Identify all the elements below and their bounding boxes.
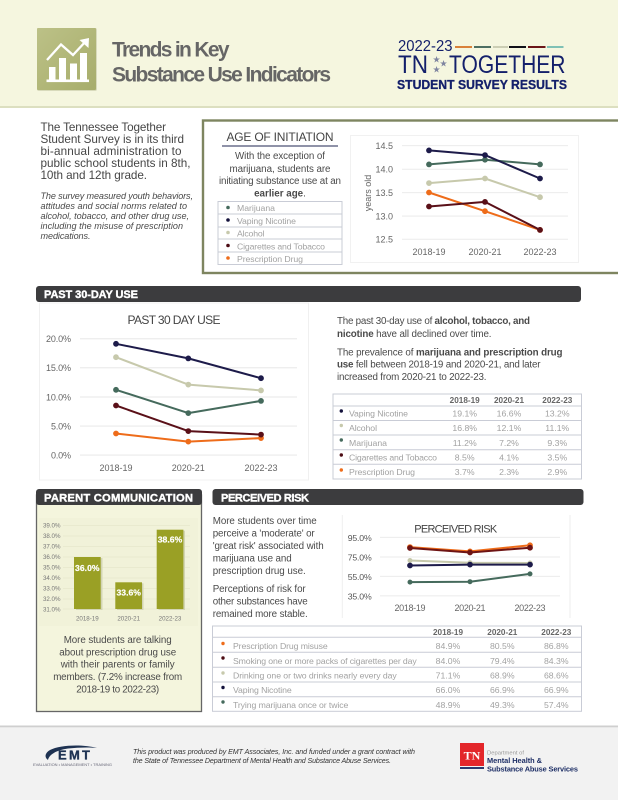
table: past 30-day use: Cigarettes and Tobacco [349,452,437,462]
bar chart: parent communication: 2022-23 [159,616,182,622]
line chart: perceived risk: PERCEIVED RISK [414,524,498,536]
table: perceived risk: 66.0% [436,685,461,695]
table: past 30-day use: 13.2% [545,408,570,418]
parent communication description [53,635,182,696]
logo: TN Department of Mental Health and Substance Abuse Services: Department of [487,750,524,756]
line chart: perceived risk: 95.0% [348,533,372,543]
intro text block: public school students in 8th, [40,157,190,170]
age of initiation legend: Marijuana [237,203,275,213]
age of initiation description: marijuana, students are [230,164,331,175]
intro text block: bi-annual administration to [40,145,182,158]
table: past 30-day use: 2020-21 [494,396,524,405]
intro text block: The survey measured youth behaviors, [40,191,193,201]
perceived risk description: perceive a 'moderate' or [213,529,315,540]
logo: TN Department of Mental Health and Substance Abuse Services [460,743,578,774]
line chart: perceived risk: 2020-21 [454,603,486,613]
age of initiation description [219,151,341,200]
table: past 30-day use: Alcohol [349,423,377,433]
intro text block [40,121,193,241]
table: past 30-day use: 16.6% [497,408,522,418]
bar chart: parent communication: 31.0% [43,606,61,614]
line chart: age of initiation: 2018-19 [412,247,446,257]
table: perceived risk: 49.3% [490,700,515,710]
intro text block: medications. [40,231,90,241]
footer credit text [133,748,415,765]
bar chart: parent communication: 2020-21 [117,616,141,622]
parent communication description: More students are talking [64,635,172,646]
line chart: age of initiation: 14.5 [375,141,393,151]
table: past 30-day use: Prescription Drug [349,467,415,477]
table: perceived risk: Prescription Drug misuse [233,641,328,651]
line chart: past 30 day use: 0.0% [51,450,71,460]
table: perceived risk: 71.1% [436,670,461,680]
table: perceived risk: 86.8% [544,641,569,651]
logo: TN Together student survey results: TN [398,51,428,79]
line chart: perceived risk: 2022-23 [514,603,546,613]
logo: TN Together student survey results: 2022-23 [398,38,452,55]
footer credit text: This product was produced by EMT Associates, Inc. and funded under a grant contract with [133,748,415,756]
table: past 30-day use: 2018-19 [450,396,480,405]
age of initiation legend: Cigarettes and Tobacco [237,242,325,252]
bar chart: parent communication: 38.6% [158,534,183,544]
table: perceived risk: 84.3% [544,656,569,666]
line chart: past 30 day use: 2020-21 [172,463,205,473]
logo: TN Together student survey results: TOGETHER [449,51,566,79]
table: perceived risk: 2022-23 [541,628,572,637]
perceived risk description: remained more stable. [213,609,308,620]
intro text block: Student Survey is in its third [40,133,184,146]
panel: age of initiation [203,120,618,273]
parent communication heading [36,489,202,505]
intro text block: 10th and 12th grade. [40,169,147,182]
bar chart: parent communication: 32.0% [43,596,61,603]
table: perceived risk: 2018-19 [433,628,463,637]
line chart: past 30 day use: 15.0% [46,363,71,373]
age of initiation legend: Prescription Drug [237,254,303,264]
bar chart: parent communication [39,518,198,626]
title: Substance Use Indicators [112,64,331,86]
table: perceived risk: 84.9% [436,641,461,651]
table: perceived risk: Smoking one or more packs of cigarettes per day [233,656,417,666]
intro text block: The Tennessee Together [40,121,166,134]
line chart: age of initiation: 12.5 [375,234,393,244]
table: perceived risk: 48.9% [436,700,461,710]
logo: TN Department of Mental Health and Substance Abuse Services: Substance Abuse Services [487,764,578,774]
table: past 30-day use: 7.2% [499,438,519,448]
line chart: past 30 day use: PAST 30 DAY USE [128,313,220,327]
table: perceived risk: Trying marijuana once or twice [233,700,348,710]
table: past 30-day use: 11.1% [545,423,570,433]
logo: TN Together student survey results: ★ [440,60,448,70]
past 30-day use description: increased from 2020-21 to 2022-23. [337,372,486,383]
table: perceived risk: Drinking one or two drinks nearly every day [233,670,397,680]
parent communication heading: PARENT COMMUNICATION [44,492,193,504]
age of initiation description: With the exception of [235,151,325,162]
line chart: past 30 day use [40,303,308,480]
logo: EMT Associates [33,746,112,767]
table: perceived risk: 66.9% [544,685,569,695]
line chart: past 30 day use: 2018-19 [100,463,132,473]
line chart: past 30 day use: 10.0% [46,392,71,402]
table: past 30-day use: 3.5% [547,452,567,462]
table: past 30-day use: 2.9% [547,467,567,477]
line chart: age of initiation: 2022-23 [523,247,557,257]
past 30-day use description: use fell between 2018-19 and 2020-21, and later [337,360,541,370]
section heading: past 30-day use: PAST 30-DAY USE [44,289,138,301]
table: perceived risk: Vaping Nicotine [233,685,292,695]
line chart: past 30 day use: 20.0% [46,334,71,344]
perceived risk description: More students over time [213,516,317,527]
table: perceived risk: 80.5% [490,641,515,651]
icon: rising trend chart [37,28,97,91]
table: past 30-day use: 19.1% [452,408,477,418]
table: past 30-day use: 4.1% [499,452,519,462]
logo: TN Together student survey results: STUDENT SURVEY RESULTS [397,78,567,92]
past 30-day use description: The prevalence of marijuana and prescription drug [337,348,563,358]
table: past 30-day use [333,394,582,479]
age of initiation description: initiating substance use at an [219,176,341,187]
line chart: age of initiation: years old [363,175,373,211]
table: perceived risk: 66.9% [490,685,515,695]
parent communication description: members. (7.2% increase from [53,672,182,683]
line chart: perceived risk: 55.0% [348,572,372,582]
table: perceived risk: 79.4% [490,656,515,666]
intro text block: including the misuse of prescription [40,221,183,231]
table: perceived risk: 57.4% [544,700,569,710]
perceived risk description: prescription drug use. [213,566,306,577]
perceived risk description: Perceptions of risk for [213,584,306,595]
bar chart: parent communication: 33.6% [116,588,141,598]
age of initiation description: earlier age. [254,188,306,200]
logo: TN Department of Mental Health and Substance Abuse Services: TN [464,748,481,762]
footer band [0,726,618,800]
table: perceived risk: 68.9% [490,670,515,680]
logo: EMT Associates: EVALUATION • MANAGEMENT • TRAINING [33,763,112,767]
bar chart: parent communication: 37.0% [43,544,61,550]
age of initiation legend [218,202,342,264]
parent communication description: with their parents or family [60,660,175,670]
bar chart: parent communication: 39.0% [43,522,61,530]
past 30-day use description: The past 30-day use of alcohol, tobacco, and [337,316,530,327]
intro text block: alcohol, tobacco, and other drug use, [40,211,189,221]
table: past 30-day use: 9.3% [547,438,567,448]
bar chart: parent communication: 36.0% [75,563,100,573]
bar chart: parent communication: 2018-19 [76,616,99,622]
logo: TN Department of Mental Health and Substance Abuse Services: Mental Health & [487,756,543,765]
logo: TN Together student survey results [397,38,567,92]
line chart: age of initiation: 13.5 [375,188,393,198]
title [112,38,331,86]
table: past 30-day use: 16.8% [452,423,477,433]
table: past 30-day use: Vaping Nicotine [349,408,408,418]
line chart: perceived risk: 35.0% [348,592,372,602]
logo: EMT Associates: EMT [58,748,90,762]
table: past 30-day use: 11.2% [453,438,477,448]
parent communication description: 2018-19 to 2022-23) [76,684,159,696]
line chart: age of initiation: 13.0 [375,212,393,222]
perceived risk description: 'great risk' associated with [213,541,324,552]
section heading: perceived risk [212,489,584,505]
bar chart: parent communication: 34.0% [43,575,61,582]
age of initiation legend: Alcohol [237,228,265,238]
panel: parent communication [36,489,202,712]
table: past 30-day use: 3.7% [455,467,475,477]
bar chart: parent communication: 38.0% [43,533,61,540]
line chart: perceived risk: 2018-19 [394,603,426,613]
logo: TN Together student survey results: ★ [432,56,441,66]
line chart: age of initiation [350,136,578,262]
table: past 30-day use: Marijuana [349,438,387,448]
perceived risk description: other substances have [213,596,308,608]
table: past 30-day use: 12.1% [497,423,522,433]
section heading: perceived risk: PERCEIVED RISK [221,492,309,504]
past 30-day use description [337,316,563,383]
parent communication description: about prescription drug use [59,647,177,658]
past 30-day use description: nicotine have all declined over time. [337,329,492,340]
line chart: age of initiation: 2020-21 [468,247,502,257]
intro text block: attitudes and social norms related to [40,201,187,211]
perceived risk description: marijuana use and [213,554,292,564]
line chart: perceived risk [342,515,570,618]
line chart: past 30 day use: 5.0% [51,422,71,432]
table: past 30-day use: 2.3% [499,467,519,477]
age of initiation heading: AGE OF INITIATION [226,130,334,144]
table: perceived risk: 68.6% [544,670,569,680]
logo: TN Together student survey results: ★ [432,66,441,76]
footer credit text: the State of Tennessee Department of Mental Health and Substance Abuse Services. [133,757,391,765]
line chart: perceived risk: 75.0% [348,552,372,562]
header band [0,0,618,108]
bar chart: parent communication: 35.0% [43,564,61,572]
bar chart: parent communication: 36.0% [43,554,61,561]
line chart: past 30 day use: 2022-23 [244,463,278,473]
table: past 30-day use: 8.5% [455,452,475,462]
perceived risk description [213,516,324,620]
table: perceived risk: 2020-21 [487,628,518,637]
table: perceived risk [212,626,582,711]
age of initiation legend: Vaping Nicotine [237,216,296,226]
title: Trends in Key [112,38,230,62]
table: perceived risk: 84.0% [436,656,461,666]
line chart: age of initiation: 14.0 [375,164,393,174]
table: past 30-day use: 2022-23 [542,396,573,405]
section heading: past 30-day use [36,286,581,302]
bar chart: parent communication: 33.0% [43,586,61,592]
